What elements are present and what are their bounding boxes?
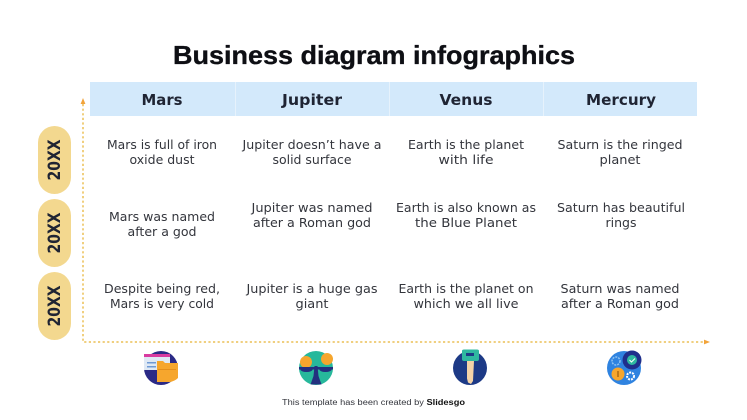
icon: gears with coin (607, 350, 642, 385)
row 3 text: Earth is the planet on (398, 282, 534, 296)
row 3 text: Mars is very cold (110, 297, 214, 311)
row 3 text: which we all live (414, 297, 518, 311)
year pill 1: 20XX (45, 140, 65, 180)
table header band: Venus (440, 91, 492, 109)
row 3 text (104, 282, 680, 311)
year pill 3: 20XX (45, 286, 65, 326)
table header band: Jupiter (281, 91, 342, 109)
row 1 text: oxide dust (130, 153, 195, 167)
row 2 text: Mars was named (109, 210, 215, 224)
row 3 text: Saturn was named (560, 282, 680, 296)
row 1 text: Saturn is the ringed (558, 138, 682, 152)
year pill 1 (38, 126, 71, 194)
row 1 text: solid surface (272, 153, 352, 167)
footer credit: This template has been created by Slidesgo (282, 398, 465, 407)
row 2 text: the Blue Planet (415, 216, 517, 230)
title: Business diagram infographics (173, 40, 575, 70)
row 1 text: with life (438, 153, 494, 167)
row 2 text: Jupiter was named (250, 201, 372, 215)
row 3 text: Despite being red, (104, 282, 220, 296)
row 2 text: Saturn has beautiful (557, 201, 685, 215)
row 3 text: after a Roman god (561, 297, 679, 311)
row 2 text: rings (606, 216, 636, 230)
year pill 2 (38, 199, 71, 267)
row 3 text: giant (296, 297, 329, 311)
row 2 text: Earth is also known as (396, 201, 536, 215)
row 1 text: Mars is full of iron (107, 138, 217, 152)
icon: balance scale with coins (299, 351, 333, 385)
row 1 text: planet (600, 153, 641, 167)
year pill 2: 20XX (45, 212, 65, 254)
row 2 text: after a Roman god (253, 216, 371, 230)
table header band: Mars (142, 91, 182, 109)
icon: document folder (144, 351, 178, 385)
row 1 text: Earth is the planet (408, 138, 524, 152)
table header band (90, 82, 697, 116)
year pill 3 (38, 272, 71, 340)
row 1 text: Jupiter doesn’t have a (241, 138, 382, 152)
row 2 text (109, 201, 685, 239)
row 3 text: Jupiter is a huge gas (245, 282, 378, 296)
dotted axes with arrows (81, 98, 710, 344)
table header band: Mercury (586, 91, 656, 109)
row 1 text (107, 138, 682, 167)
icon: key (453, 350, 487, 385)
row 2 text: after a god (128, 225, 196, 239)
